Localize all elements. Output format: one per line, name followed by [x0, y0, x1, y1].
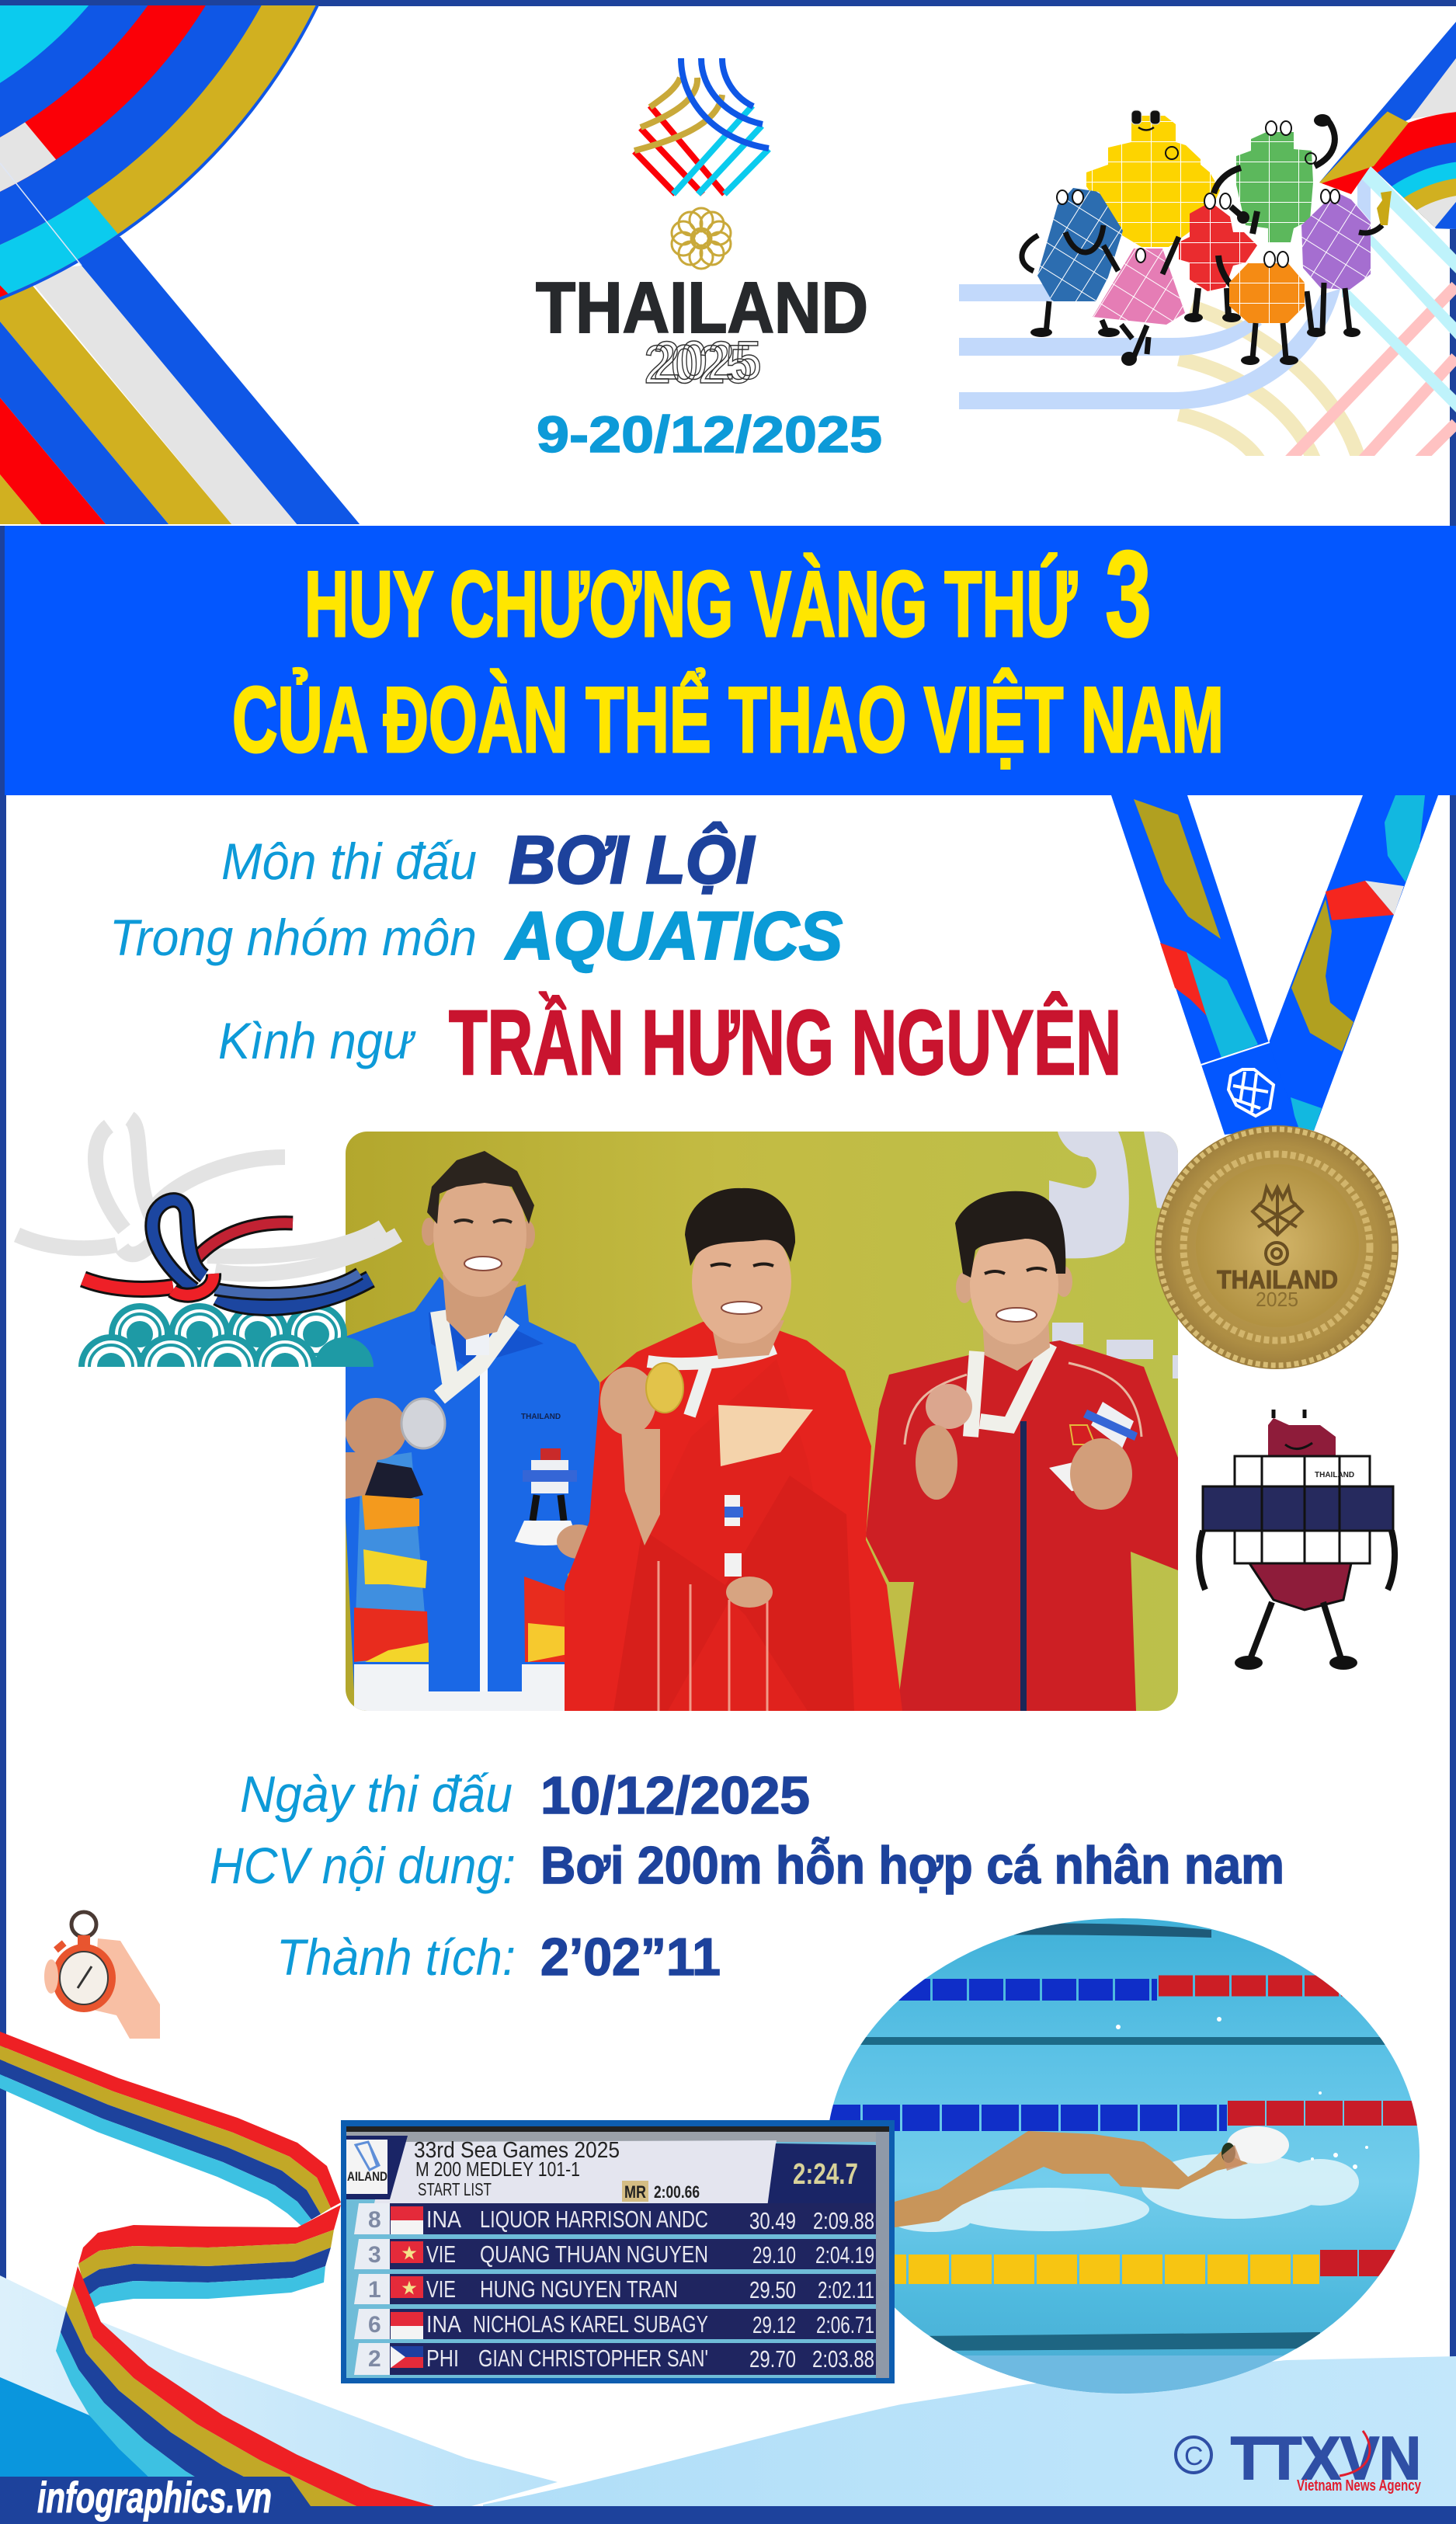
board row: lane 3: 29.10	[752, 2241, 796, 2268]
board row: lane 6	[354, 2309, 876, 2339]
board row: lane 1: ★	[401, 2280, 417, 2297]
jacket logo: THAILAND	[521, 1413, 561, 1421]
board row: lane 2	[354, 2343, 876, 2375]
label: swimmer: Kình ngư	[218, 1012, 416, 1069]
board row: lane 2: 2:03.88	[812, 2345, 874, 2373]
ribbon upper run	[0, 2032, 341, 2226]
mascot: green	[1214, 114, 1335, 242]
board row: lane 8: INA	[426, 2206, 461, 2233]
value: match date: 10/12/2025	[540, 1766, 810, 1825]
logo wordmark: THAILAND	[536, 267, 868, 348]
board header: 2:24.7	[793, 2158, 858, 2191]
board row: lane 6: 2:06.71	[816, 2311, 874, 2338]
info block: discipline and athlete	[109, 822, 1121, 1094]
value: swimming: BƠI LỘI	[509, 822, 756, 898]
board row: lane 6: INA	[426, 2310, 461, 2338]
board row: lane 3: 2:04.19	[815, 2241, 874, 2268]
logo: TTXVN copyright: C	[1184, 2442, 1204, 2471]
TTXVN wordmark: TTXVN	[1231, 2424, 1421, 2492]
board header: 33rd Sea Games 2025	[414, 2138, 620, 2163]
mascot: Thai flag character	[1199, 1410, 1395, 1670]
bronze medal	[926, 1384, 972, 1429]
board header	[346, 2136, 876, 2207]
board row: lane 1	[354, 2274, 876, 2304]
wave overlay on photo bottom	[823, 2355, 1429, 2402]
board row: lane 2: 29.70	[749, 2345, 796, 2373]
medal year: 2025	[1256, 1288, 1298, 1311]
background wave: right pale	[483, 2356, 1456, 2508]
pool far dark line	[1014, 1923, 1211, 1938]
decoration: top-right mascot backdrop stripes	[959, 22, 1456, 456]
logo: TTXVN copyright	[1176, 2424, 1422, 2494]
silver medal	[345, 1398, 407, 1460]
lanyard	[648, 1348, 775, 1416]
board row: lane 1: 2:02.11	[818, 2276, 874, 2303]
label: result: Thành tích:	[276, 1928, 516, 1986]
gold medal	[1155, 1125, 1399, 1369]
knot ribbons	[83, 1200, 370, 1307]
board row: lane 6: 29.12	[752, 2311, 796, 2338]
board row: lane 6: NICHOLAS KAREL SUBAGY	[473, 2310, 708, 2338]
mascot badge: THAILAND	[1315, 1471, 1354, 1479]
medal lanyard	[971, 1344, 1050, 1437]
photo: swimmer in pool	[823, 1914, 1429, 2402]
water splash	[893, 2154, 1359, 2232]
label: gold medal event: HCV nội dung:	[210, 1837, 516, 1894]
board row: lane 2: GIAN CHRISTOPHER SAN'	[478, 2345, 708, 2372]
board row: lane 3	[354, 2239, 876, 2269]
mascot: orange	[1229, 252, 1305, 365]
board row: lane 1: 1	[368, 2277, 381, 2303]
background wave: left pale	[0, 2275, 558, 2508]
board header: AILAND	[347, 2169, 387, 2184]
right trophy mascot	[1049, 1402, 1138, 1510]
label: discipline: Môn thi đấu	[221, 833, 477, 890]
value: aquatics: AQUATICS	[505, 899, 843, 974]
board row: lane 3: ★	[401, 2245, 417, 2262]
background wave: left deep blue	[0, 2377, 155, 2508]
teal wave scallops	[78, 1303, 374, 1367]
head	[422, 1218, 434, 1246]
mascot: purple	[1301, 189, 1392, 337]
jacket art panels	[354, 1452, 429, 1662]
mascot: yellow	[1086, 110, 1220, 247]
board header: START LIST	[418, 2179, 492, 2199]
copyright mark	[1176, 2437, 1211, 2473]
board row: lane 8: 30.49	[749, 2207, 796, 2234]
pool lane rope: top	[823, 1986, 1421, 1990]
scoreboard photo	[341, 2120, 895, 2383]
pool dark line: lower	[916, 2332, 1320, 2351]
value: event: Bơi 200m hỗn hợp cá nhân nam	[540, 1836, 1284, 1895]
board row: lane 2: 2	[368, 2346, 381, 2372]
mascot group	[1022, 110, 1392, 366]
mascot: red	[1179, 193, 1257, 322]
footer bar	[0, 2506, 1456, 2524]
board row: lane 3: 3	[368, 2242, 381, 2268]
pool lane rope: middle	[823, 2113, 1421, 2118]
board row: lane 8	[354, 2203, 876, 2234]
label: group: Trong nhóm môn	[109, 909, 477, 966]
medal ribbon	[1111, 795, 1438, 1135]
left athlete: blue jacket	[345, 1151, 600, 1711]
board row: lane 2: PHI	[426, 2345, 459, 2372]
left trophy mascot	[515, 1448, 588, 1559]
middle athlete: Vietnam flag	[565, 1188, 902, 1711]
head	[956, 1272, 971, 1303]
ribbon lower run	[56, 2266, 434, 2516]
board row: lane 1: HUNG NGUYEN TRAN	[480, 2275, 678, 2303]
small trophy parts	[725, 1495, 740, 1526]
board header: M 200 MEDLEY 101-1	[415, 2157, 580, 2181]
swimmer	[895, 2131, 1248, 2227]
logo flower	[672, 208, 731, 269]
head	[711, 1320, 784, 1359]
label: match date: Ngày thi đấu	[240, 1765, 513, 1823]
board row: lane 6: 6	[368, 2312, 381, 2338]
info block: results	[210, 1765, 1284, 1987]
right athlete: red jacket	[866, 1191, 1178, 1711]
mascot: pink	[1093, 237, 1185, 366]
logo: Thailand 2025 SEA Games	[536, 58, 868, 395]
board header: MR	[624, 2182, 646, 2202]
ribbon fold	[78, 2205, 341, 2307]
banner	[5, 526, 1456, 795]
board row: lane 1: VIE	[426, 2275, 456, 2303]
board row: lane 8: 8	[368, 2207, 381, 2233]
icon: stopwatch in hand	[44, 1912, 160, 2039]
board row: lane 3: QUANG THUAN NGUYEN	[480, 2241, 708, 2268]
board header: 2:00.66	[654, 2182, 700, 2202]
footer site tag: infographics.vn	[37, 2473, 272, 2522]
board row: lane 1: 29.50	[749, 2276, 796, 2303]
mascot: blue	[1022, 188, 1123, 337]
board row: lane 8: LIQUOR HARRISON ANDC	[480, 2206, 708, 2233]
logo year: 2025	[644, 334, 752, 395]
banner number 3: 3	[1105, 526, 1152, 662]
medal lanyard	[439, 1311, 513, 1397]
medal wordmark: THAILAND	[1217, 1265, 1338, 1294]
pool dark line: upper	[860, 2037, 1385, 2045]
decoration: ribbon knot over waves	[17, 1118, 398, 1399]
gray ribbon swirl	[17, 1118, 398, 1274]
ribbon: red gold blue cyan	[0, 2032, 434, 2516]
logo weave mark	[634, 58, 769, 194]
photo: three medalists on the podium	[345, 1132, 1179, 1711]
event date: 9-20/12/2025	[537, 405, 882, 463]
logo year: 2025	[653, 330, 762, 391]
swim cap	[1227, 2126, 1289, 2164]
value: athlete name: TRẦN HƯNG NGUYÊN	[449, 991, 1121, 1094]
arm and gold medal	[621, 1429, 660, 1545]
banner heading line 1: HUY CHƯƠNG VÀNG THỨ	[304, 552, 1077, 656]
pool lane rope: yellow	[823, 2263, 1421, 2269]
sponsor lettering in backdrop	[1049, 1132, 1179, 1378]
board row: lane 3: VIE	[426, 2241, 456, 2268]
value: result time: 2’02”11	[540, 1928, 721, 1987]
decoration: top-left woven stripes	[0, 0, 381, 525]
board row: lane 8: 2:09.88	[813, 2207, 874, 2234]
medal emblem	[1253, 1187, 1302, 1264]
